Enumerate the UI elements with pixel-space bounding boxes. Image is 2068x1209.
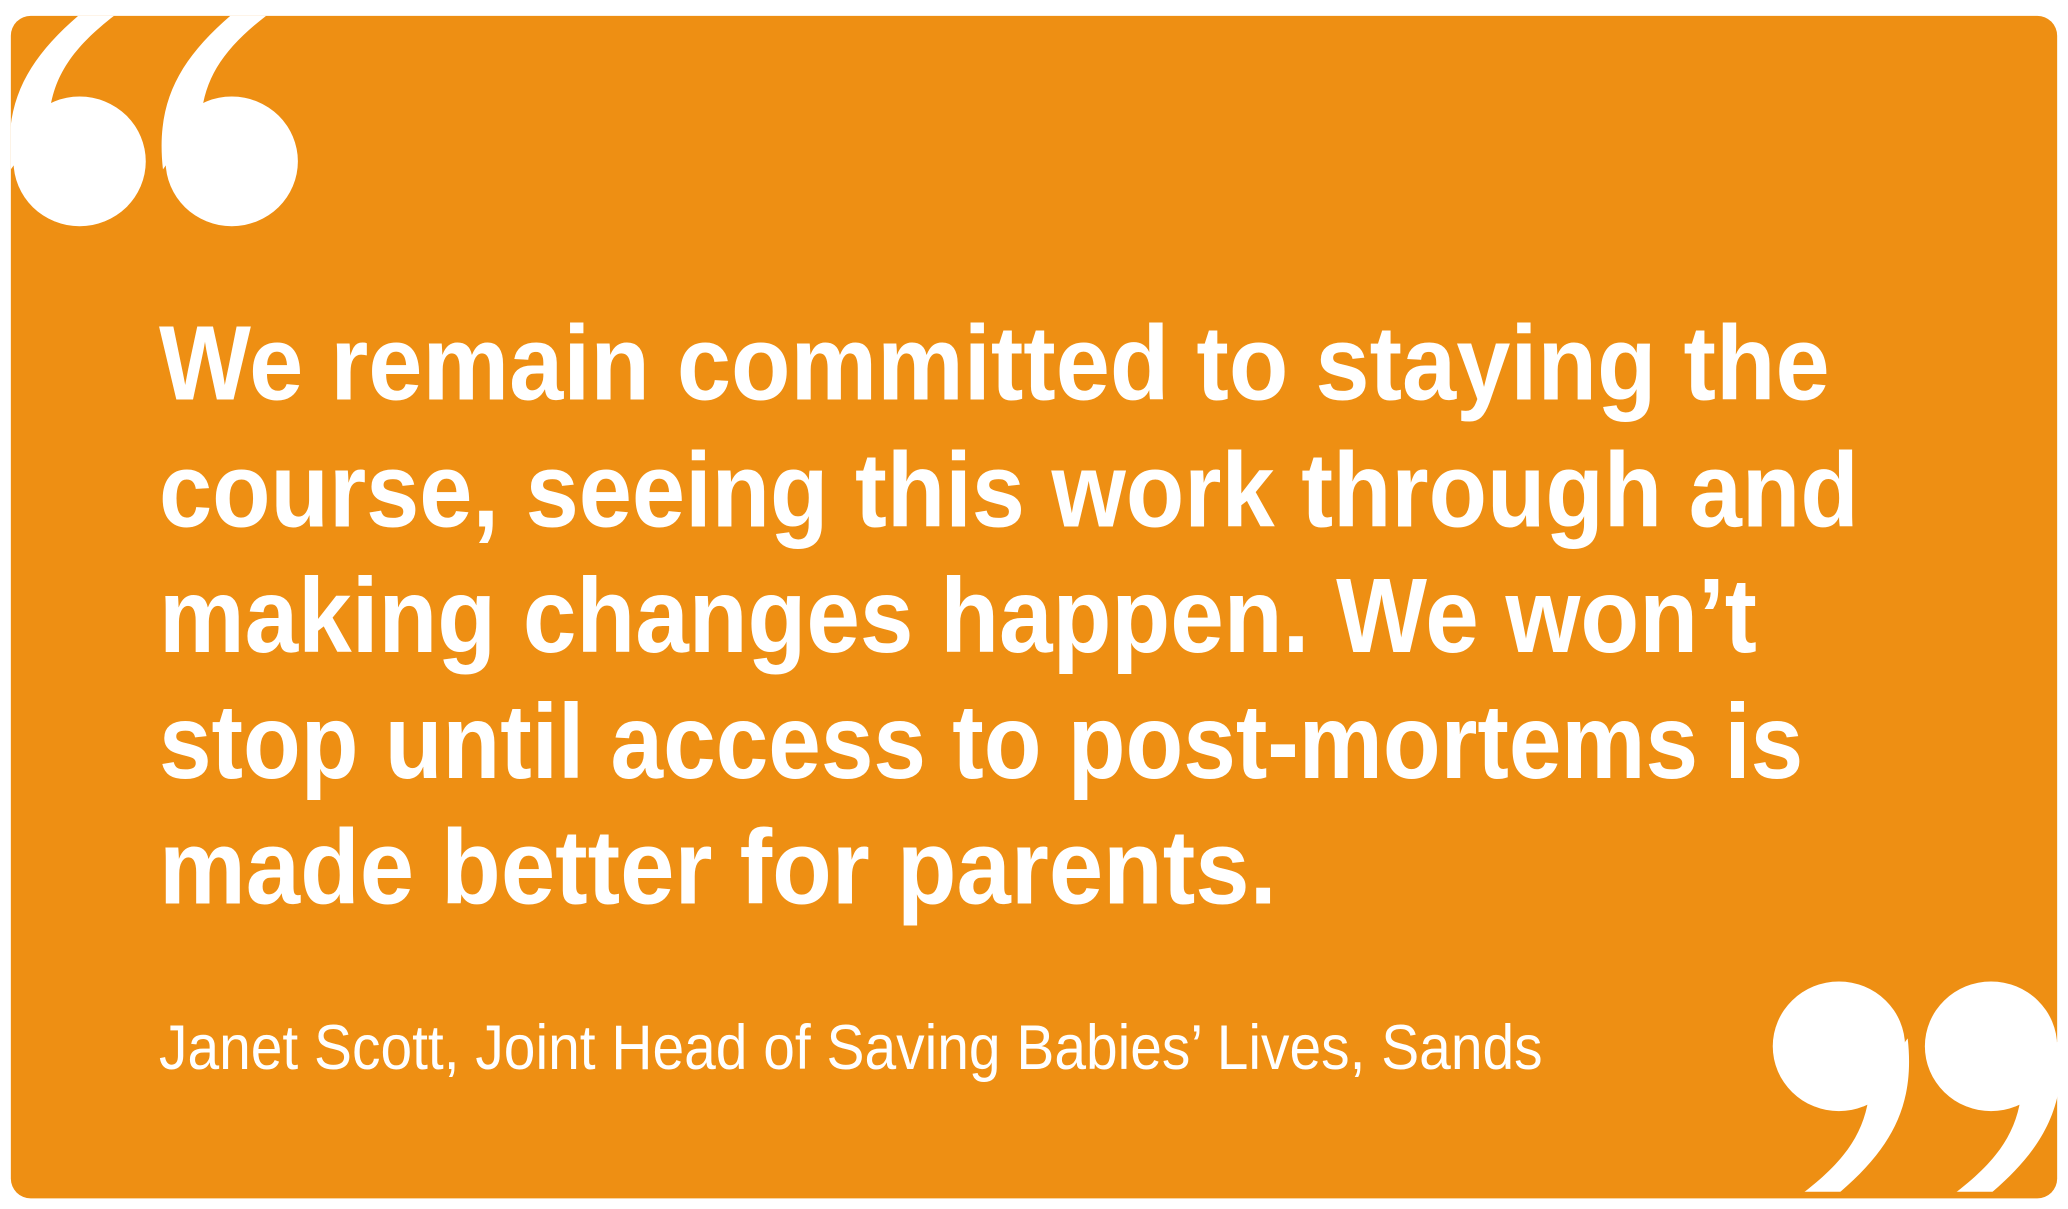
icon: opening quote marks [9,8,298,226]
attribution: Janet Scott, Joint Head of Saving Babies’ Lives, Sands [159,1013,1543,1083]
quote text: making changes happen. We won’t [159,557,1757,675]
quote text [159,304,1859,926]
quote text: stop until access to post-mortems is [159,683,1803,801]
quote text: course, seeing this work through and [159,431,1859,549]
quote text: We remain committed to staying the [159,304,1830,422]
quote text: made better for parents. [159,808,1277,926]
icon: closing quote marks [1773,981,2061,1200]
